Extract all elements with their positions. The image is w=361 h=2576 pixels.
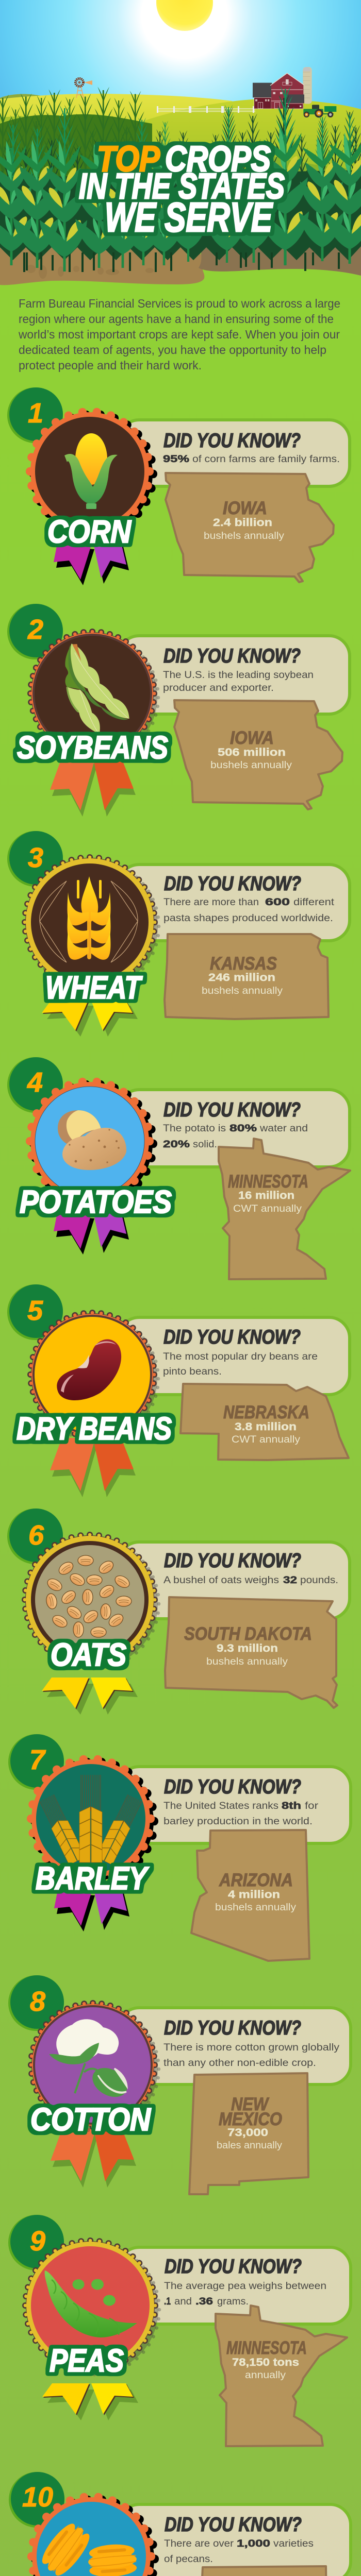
badge <box>30 1081 153 1204</box>
did you know panel <box>119 2008 351 2084</box>
state label: 78,150 tons <box>232 2357 299 2368</box>
soil <box>0 240 361 285</box>
did you know heading: DID YOU KNOW? <box>164 1550 301 1572</box>
fact: The average pea weighs between <box>164 2281 326 2292</box>
rank number circle <box>8 2215 64 2270</box>
state label: 3.8 million <box>235 1421 297 1433</box>
state label <box>184 1624 312 1667</box>
badge <box>30 632 158 759</box>
state label: bushels annually <box>202 986 283 996</box>
fact: barley production in the world. <box>163 1816 313 1827</box>
icon: pecans <box>37 2518 138 2576</box>
did you know panel <box>119 2504 351 2576</box>
ribbon <box>54 541 129 585</box>
fact <box>163 670 314 693</box>
fact: 95% <box>163 454 189 465</box>
front corn plants <box>0 128 361 272</box>
state label <box>228 1172 308 1214</box>
badge <box>25 1535 159 1669</box>
state: Minnesota <box>216 2306 347 2446</box>
crop name: WHEAT <box>45 970 143 1006</box>
state label: bushels annually <box>215 1902 297 1913</box>
state: New Mexico <box>189 2073 308 2194</box>
did you know heading: DID YOU KNOW? <box>164 873 301 895</box>
crop 10: pecans <box>9 2472 351 2576</box>
ribbon <box>42 999 138 1037</box>
did you know heading: DID YOU KNOW? <box>163 1099 301 1121</box>
state label: 246 million <box>208 972 275 984</box>
crop name: COTTON <box>30 2102 151 2138</box>
crop 5: dry beans <box>7 1284 350 1497</box>
icon: cotton <box>49 2019 133 2103</box>
dark mid corn band <box>0 170 361 260</box>
badge <box>25 2241 159 2375</box>
state: Kansas <box>165 934 329 1019</box>
state label <box>202 954 283 996</box>
crop 9: peas <box>8 2215 351 2446</box>
state label: 9.3 million <box>217 1642 278 1654</box>
state label: NEBRASKA <box>223 1402 309 1422</box>
fact: There are over <box>164 2538 234 2549</box>
fact: 8th <box>282 1801 301 1811</box>
crop 4: potatoes <box>7 1057 350 1279</box>
state: Iowa <box>174 700 342 809</box>
header scene: farm and cornfield <box>0 0 361 285</box>
rank number circle <box>8 1975 64 2031</box>
rank number circle <box>9 2472 64 2528</box>
sky <box>0 0 361 155</box>
did you know heading: DID YOU KNOW? <box>164 2017 301 2039</box>
fact: than any other non-edible crop. <box>163 2058 316 2069</box>
state: Nebraska <box>180 1384 349 1460</box>
did you know heading: DID YOU KNOW? <box>163 645 301 667</box>
crop name: CORN <box>47 514 132 550</box>
intro paragraph: Farm Bureau Financial Services is proud to work across a large <box>19 297 340 310</box>
fact: There are more than <box>163 897 259 908</box>
back corn rows, right <box>153 86 361 191</box>
intro paragraph: world’s most important crops are kept safe. When you join our <box>18 328 340 341</box>
rank number: 1 <box>28 398 43 429</box>
state label: NEW <box>231 2094 270 2114</box>
did you know heading: DID YOU KNOW? <box>163 430 301 452</box>
state label: bushels annually <box>204 531 285 541</box>
crop 7: barley <box>8 1734 351 1961</box>
state label <box>226 2338 307 2381</box>
did you know panel <box>119 1317 350 1395</box>
ribbon <box>42 1677 138 1715</box>
state: Minnesota <box>219 1139 350 1279</box>
intro paragraph: protect people and their hard work. <box>19 359 202 372</box>
badge <box>25 857 159 991</box>
fact: water and <box>259 1123 308 1134</box>
state label: CWT annually <box>232 1434 301 1445</box>
did you know panel <box>119 1542 350 1619</box>
crop 3: wheat <box>7 831 350 1037</box>
crop name: POTATOES <box>20 1184 172 1220</box>
fact <box>163 2042 340 2069</box>
state label: SOUTH DAKOTA <box>184 1624 312 1644</box>
did you know heading: DID YOU KNOW? <box>164 1776 301 1798</box>
fact: There is more cotton grown globally <box>163 2042 340 2053</box>
icon: wheat <box>40 876 138 962</box>
back corn rows, left <box>0 87 152 211</box>
rank number: 5 <box>27 1295 43 1326</box>
state label: 506 million <box>218 747 286 758</box>
fact: A bushel of oats weighs <box>163 1575 279 1586</box>
fact: solid. <box>193 1139 217 1150</box>
rank number: 7 <box>29 1744 46 1775</box>
intro paragraph: dedicated team of agents, you have the opportunity to help <box>19 343 326 357</box>
tractor and wagon <box>303 105 336 117</box>
fact: 600 <box>265 897 290 908</box>
rank number: 3 <box>28 842 43 873</box>
state label: CWT annually <box>233 1204 302 1214</box>
crop name: OATS <box>51 1637 126 1673</box>
fact <box>163 1123 308 1150</box>
fact: pasta shapes produced worldwide. <box>163 913 333 924</box>
fact: The most popular dry beans are <box>163 1351 318 1362</box>
did you know panel <box>119 1767 351 1843</box>
badge <box>30 1313 158 1440</box>
did you know panel <box>119 2247 351 2324</box>
rank number circle <box>7 387 63 443</box>
title: IN THE STATES <box>79 166 285 206</box>
crop 2: soybeans <box>7 604 350 817</box>
badge <box>31 1759 154 1881</box>
rank number circle <box>7 1057 63 1113</box>
title: TOP <box>97 139 160 179</box>
rank number: 9 <box>30 2226 45 2257</box>
title <box>79 139 285 240</box>
fact <box>163 1351 318 1377</box>
icon: peas <box>45 2270 137 2337</box>
rank number circle <box>8 1734 64 1790</box>
fact: 1,000 <box>237 2538 270 2549</box>
fact: 80% <box>229 1123 257 1134</box>
fact: grams. <box>217 2296 249 2307</box>
state label <box>215 1870 297 1913</box>
fact: for <box>305 1801 319 1811</box>
state label: 73,000 <box>227 2127 268 2139</box>
fact: of corn farms are family farms. <box>192 454 340 465</box>
icon: corn <box>64 433 118 509</box>
state label: bales annually <box>217 2140 283 2151</box>
fact: 32 <box>283 1575 297 1586</box>
fact: producer and exporter. <box>163 683 274 693</box>
rank number: 4 <box>27 1067 43 1098</box>
state: Iowa <box>166 473 334 582</box>
fact <box>163 897 335 924</box>
icon: kidney bean <box>57 1340 121 1400</box>
state label: bushels annually <box>206 1656 288 1667</box>
ribbon <box>54 1210 129 1255</box>
fact: varieties <box>273 2538 314 2549</box>
crop name: BARLEY <box>36 1861 150 1896</box>
state label: MINNESOTA <box>226 2338 307 2358</box>
fact: .36 <box>195 2296 213 2307</box>
state label <box>217 2094 283 2151</box>
fact: The potato is <box>163 1123 226 1134</box>
ribbon <box>54 1887 129 1931</box>
state: South Dakota <box>165 1597 337 1708</box>
intro paragraph <box>18 297 340 372</box>
fact: .1 <box>164 2296 171 2307</box>
fact: different <box>293 897 335 908</box>
state label: KANSAS <box>210 954 277 974</box>
title: WE SERVE <box>105 194 273 240</box>
state label: MINNESOTA <box>228 1172 308 1192</box>
rank number: 10 <box>22 2482 53 2513</box>
did you know panel <box>119 865 350 941</box>
title: CROPS <box>165 139 271 179</box>
state label: MEXICO <box>219 2109 282 2129</box>
fact: The U.S. is the leading soybean <box>163 670 314 681</box>
state label: ARIZONA <box>219 1870 293 1890</box>
state label <box>223 1402 309 1445</box>
state label: bushels annually <box>210 760 292 771</box>
rank number: 8 <box>30 1986 45 2017</box>
badge <box>31 2497 155 2576</box>
state label: annually <box>245 2370 286 2381</box>
state label: IOWA <box>230 728 274 748</box>
fence <box>157 106 255 113</box>
crop name: PEAS <box>50 2343 124 2379</box>
rank number: 2 <box>27 614 43 645</box>
rank number circle <box>7 1509 63 1564</box>
state label: IOWA <box>223 498 267 518</box>
crop 8: cotton <box>8 1975 351 2194</box>
state label: 4 million <box>228 1889 280 1901</box>
state: Arizona <box>191 1830 309 1961</box>
crop name: DRY BEANS <box>17 1411 172 1447</box>
rank number: 6 <box>28 1520 44 1551</box>
fact <box>164 2538 314 2565</box>
fact: The United States ranks <box>163 1801 278 1811</box>
icon: soybeans <box>65 643 129 734</box>
sun <box>156 0 213 31</box>
ribbon <box>42 2383 138 2420</box>
windmill <box>75 78 92 98</box>
state: New Mexico <box>196 2566 327 2576</box>
ribbon <box>50 757 136 817</box>
barn and silo <box>253 67 312 109</box>
rank number circle <box>7 604 63 659</box>
state label <box>210 728 292 771</box>
fact: 20% <box>163 1139 190 1150</box>
icon: barley <box>39 1775 143 1865</box>
rolling hills <box>0 94 361 216</box>
icon: oats <box>45 1555 132 1637</box>
fact: and <box>174 2296 192 2307</box>
rank number circle <box>7 831 63 887</box>
state label: 16 million <box>238 1190 294 1201</box>
did you know heading: DID YOU KNOW? <box>163 1326 301 1348</box>
ribbon <box>50 1438 136 1497</box>
state label <box>204 498 285 541</box>
fact <box>164 2281 326 2307</box>
did you know panel <box>119 420 350 486</box>
did you know panel <box>119 1090 350 1167</box>
crop 6: oats <box>7 1509 350 1715</box>
crop name: SOYBEANS <box>17 730 168 766</box>
fact: pinto beans. <box>163 1366 222 1377</box>
badge <box>31 2003 159 2131</box>
did you know heading: DID YOU KNOW? <box>165 2256 302 2278</box>
intro paragraph: region where our agents have a hand in ensuring some of the <box>19 312 334 326</box>
fact: of pecans. <box>164 2554 213 2565</box>
rank number circle <box>7 1284 63 1340</box>
icon: potatoes <box>58 1110 126 1170</box>
did you know heading: DID YOU KNOW? <box>165 2514 302 2536</box>
crop 1: corn <box>7 387 350 585</box>
did you know panel <box>119 636 350 714</box>
badge <box>30 412 153 534</box>
ribbon <box>51 2128 136 2188</box>
fact: pounds. <box>300 1575 338 1586</box>
dark corn stalk legs <box>23 252 340 272</box>
state label: 2.4 billion <box>213 517 272 529</box>
fact <box>163 1801 319 1827</box>
